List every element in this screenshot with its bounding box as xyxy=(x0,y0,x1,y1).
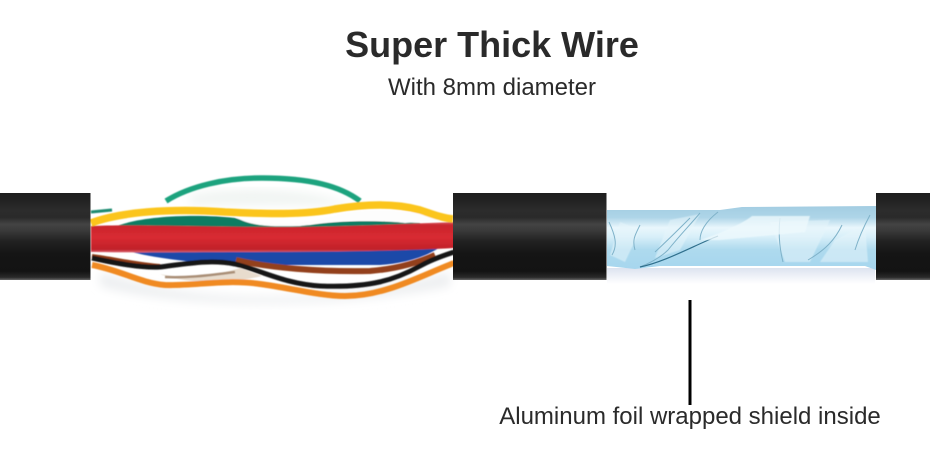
red wire xyxy=(91,222,454,252)
foil shield xyxy=(607,206,876,270)
green loop wire xyxy=(91,178,385,220)
dark green wire xyxy=(112,216,420,229)
orange wire xyxy=(92,263,454,296)
black wire xyxy=(92,252,454,286)
right jacket xyxy=(876,193,930,280)
callout label: Aluminum foil wrapped shield inside xyxy=(499,403,881,430)
subtitle: With 8mm diameter xyxy=(388,74,596,101)
white wire xyxy=(235,210,445,226)
wire bundle xyxy=(91,178,454,296)
pale wires under black xyxy=(160,268,262,282)
pointer line xyxy=(688,300,692,405)
middle jacket xyxy=(453,193,606,280)
yellow wire xyxy=(91,205,453,223)
brown wire xyxy=(92,255,435,277)
blue wire xyxy=(125,247,440,265)
left jacket xyxy=(0,193,90,280)
soft shadows xyxy=(100,190,875,303)
title: Super Thick Wire xyxy=(345,24,639,65)
